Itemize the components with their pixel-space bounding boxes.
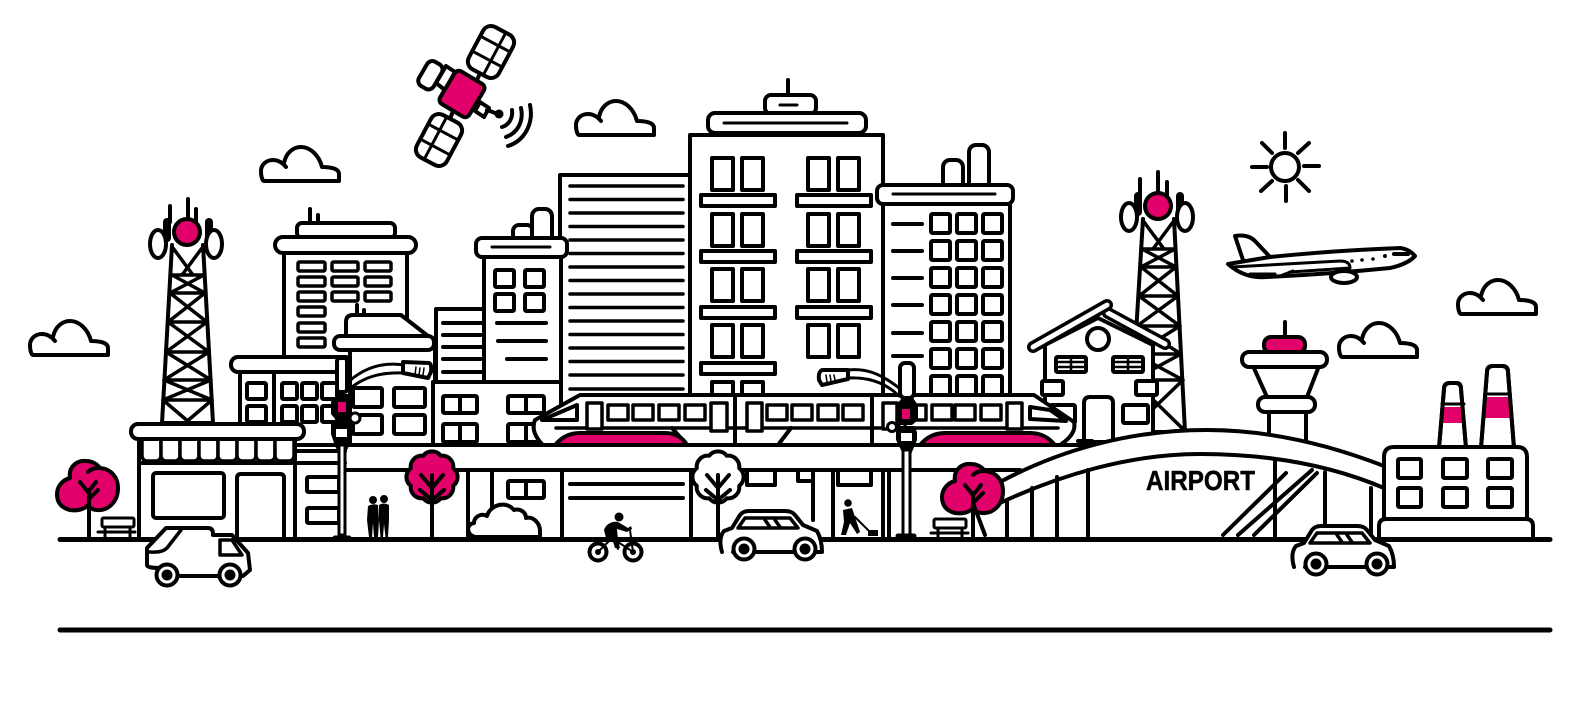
telecom tower right — [1121, 172, 1193, 432]
tree: pink right — [942, 464, 1003, 538]
train windows — [587, 403, 1022, 431]
shop — [131, 424, 345, 539]
chimney small — [1439, 383, 1466, 448]
ground line — [60, 537, 1550, 542]
train — [345, 395, 1080, 445]
windows — [701, 158, 871, 402]
tree: white — [692, 451, 744, 538]
tree: pink left — [57, 461, 118, 538]
control tower — [1242, 322, 1327, 445]
airport arch — [1000, 430, 1384, 538]
building: main tower with balconies — [690, 80, 883, 405]
bench — [931, 519, 968, 538]
building: roof-cap office — [275, 209, 416, 370]
cloud — [30, 321, 108, 355]
satellite — [413, 23, 531, 169]
elevated viaduct — [345, 445, 1090, 538]
cloud — [1339, 323, 1417, 357]
car right — [1292, 526, 1394, 574]
cyclist — [590, 512, 642, 560]
awning — [142, 434, 294, 461]
icon: airplane — [1228, 236, 1415, 283]
lower road line — [60, 628, 1550, 632]
building: narrow striped — [436, 309, 484, 389]
people — [367, 495, 389, 537]
house — [1033, 305, 1165, 445]
factory — [1379, 366, 1533, 538]
car centre — [720, 511, 822, 560]
side annex — [295, 451, 345, 539]
building: low left — [231, 357, 352, 445]
building: right with chimneys — [877, 145, 1013, 403]
building: domed — [334, 305, 435, 445]
cloud — [576, 101, 654, 135]
bush — [468, 505, 540, 537]
building: tanks and windows — [476, 209, 567, 400]
icon: sun — [1252, 133, 1319, 201]
telecom tower left — [150, 199, 222, 423]
building: tall striped — [560, 175, 690, 405]
chimney large — [1481, 366, 1514, 448]
cloud — [261, 147, 339, 181]
building: lower block — [433, 382, 561, 448]
delivery van — [147, 528, 250, 586]
tree: pink centre — [406, 451, 458, 538]
under-viaduct structures — [468, 470, 889, 538]
bench — [98, 518, 135, 538]
walker with dog — [841, 499, 878, 536]
street lamp right — [819, 363, 918, 536]
cloud — [1458, 280, 1536, 314]
airport label: AIRPORT — [1146, 465, 1255, 496]
street lamp left — [331, 358, 431, 538]
